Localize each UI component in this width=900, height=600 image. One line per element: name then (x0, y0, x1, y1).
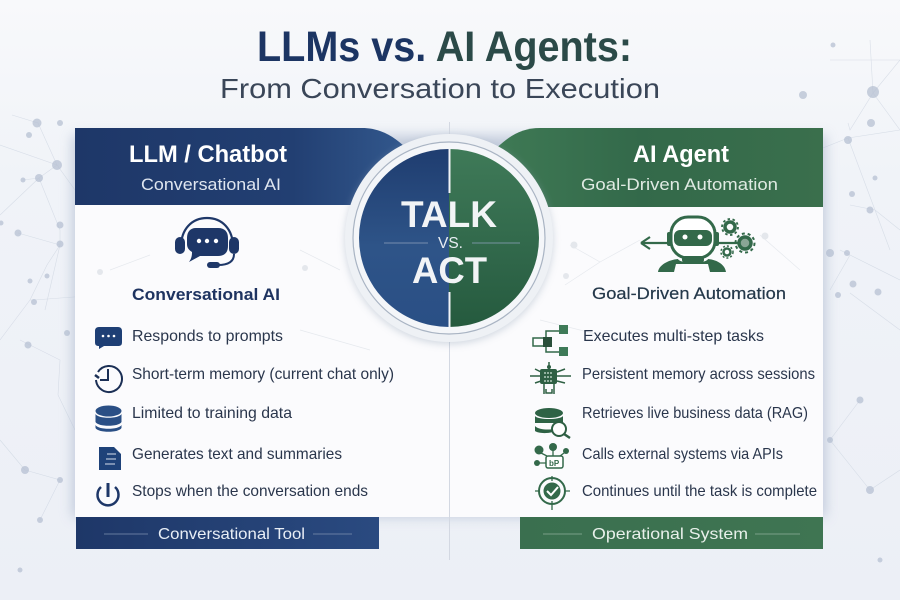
icon: database (96, 406, 122, 432)
icon: power (98, 483, 119, 505)
panel: LLM / Chatbot header (75, 128, 410, 205)
header title: AI Agent (633, 141, 729, 168)
item: calls: Calls external systems via APIs (582, 446, 783, 463)
item: retrieves: Retrieves live business data (RAG) (582, 405, 808, 422)
footer: Conversational Tool: Conversational Tool (158, 526, 305, 543)
item: memory: Short-term memory (current chat only) (132, 366, 394, 383)
list: agent capabilities (530, 325, 817, 510)
panel body (75, 200, 823, 517)
badge word: vs: VS. (438, 235, 463, 252)
title: LLMs vs. AI Agents: (257, 23, 632, 71)
subtitle: From Conversation to Execution (220, 73, 660, 104)
badge word: talk: TALK (401, 194, 497, 235)
icon: data search (535, 408, 570, 438)
badge word: act: ACT (412, 250, 487, 291)
header subtitle: Conversational AI (141, 175, 281, 194)
icon: memory chip (530, 362, 571, 394)
icon: clock with back arrow (95, 366, 122, 392)
footer: Operational System (520, 517, 823, 549)
header title: LLM / Chatbot (129, 141, 287, 168)
icon: API nodes (534, 443, 569, 468)
item: responds: Responds to prompts (132, 328, 283, 345)
left section heading: Conversational AI (132, 285, 280, 304)
header subtitle: Goal-Driven Automation (581, 175, 778, 194)
icon: document (99, 447, 121, 470)
item: stops: Stops when the conversation ends (132, 483, 368, 500)
icon: target check (535, 476, 570, 510)
item: continues: Continues until the task is complete (582, 483, 817, 500)
icon: API nodes: bP (549, 459, 560, 468)
panel shadow (72, 135, 826, 517)
icon: robot agent (641, 217, 754, 272)
footer: Operational System: Operational System (592, 526, 748, 543)
item: executes: Executes multi-step tasks (583, 328, 764, 345)
list: LLM capabilities (95, 327, 394, 505)
icon: headset chat (175, 218, 239, 268)
item: generates: Generates text and summaries (132, 446, 342, 463)
icon: speech bubble (95, 327, 122, 349)
footer: Conversational Tool (76, 517, 379, 549)
title (220, 23, 660, 104)
icon: workflow (533, 325, 568, 356)
right section heading: Goal-Driven Automation (592, 284, 786, 303)
item: persistent: Persistent memory across sessions (582, 366, 815, 383)
item: training: Limited to training data (132, 405, 292, 422)
badge: Talk vs. Act (345, 134, 553, 344)
panel: AI Agent header (490, 128, 823, 207)
